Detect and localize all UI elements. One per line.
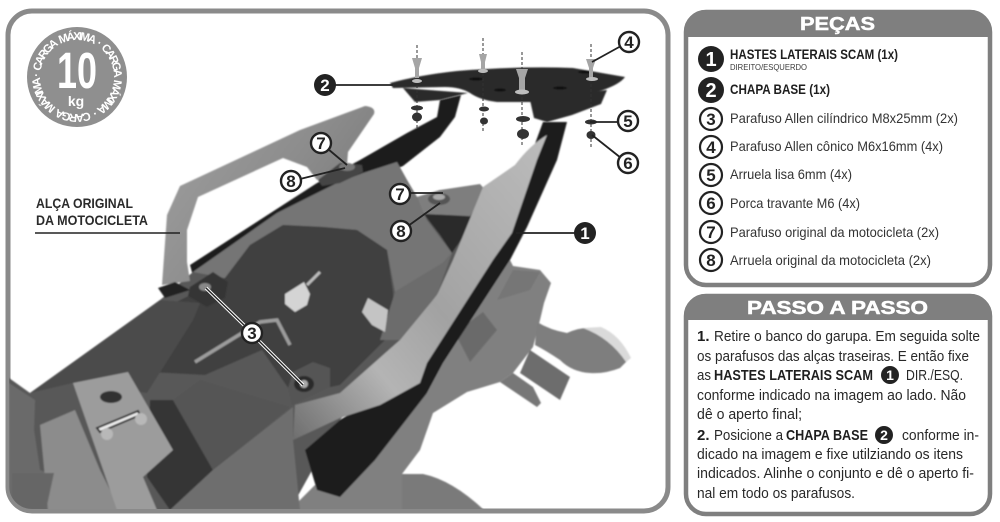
step text: 2. — [697, 427, 710, 444]
step text: dicado na imagem e fixe utilziando os itens — [697, 446, 963, 463]
callout 8 left — [281, 171, 301, 191]
handle label: DA MOTOCICLETA — [36, 212, 148, 228]
part 3: 3 — [706, 110, 716, 129]
callout 6 — [618, 153, 638, 173]
part 1 — [698, 46, 898, 72]
part 7: 7 — [706, 223, 716, 242]
right grab handle — [293, 135, 547, 440]
connector — [285, 282, 310, 312]
left black tube — [190, 95, 461, 276]
part 1: HASTES LATERAIS SCAM (1x) — [730, 46, 898, 62]
part 7 — [700, 221, 939, 243]
callout 1: 1 — [580, 224, 590, 243]
right body piece — [424, 214, 470, 253]
callout lines — [206, 46, 621, 385]
callout 5: 5 — [623, 112, 633, 131]
heading: steps: PASSO A PASSO — [747, 298, 928, 318]
step text: dê o aperto final; — [697, 406, 802, 423]
part 1: 1 — [705, 49, 717, 71]
step text: DIR./ESQ. — [906, 367, 963, 384]
part 5: 5 — [706, 166, 716, 185]
panel: parts list — [684, 10, 992, 285]
callout 7 right — [390, 184, 410, 204]
step text: conforme indicado na imagem ao lado. Não — [697, 387, 966, 404]
step text: 1. — [697, 328, 710, 345]
part 3 — [700, 108, 958, 130]
part 1: DIREITO/ESQUERDO — [730, 62, 807, 72]
seat and latch area — [9, 384, 48, 509]
callout 7 left: 7 — [316, 134, 326, 153]
callout 4 — [619, 32, 639, 52]
callout 1 — [574, 222, 596, 244]
step text: Posicione a — [714, 427, 784, 444]
step text: nal em todo os parafusos. — [697, 485, 855, 502]
tray lower — [170, 407, 300, 510]
callout 3 — [242, 323, 262, 343]
latch plate — [73, 372, 173, 510]
part 4 — [700, 136, 943, 158]
part 5 — [700, 164, 852, 186]
original far grab handle — [162, 106, 374, 285]
near clamp block — [288, 362, 330, 394]
step text: as — [697, 367, 711, 384]
part 8 — [700, 249, 931, 271]
panel: motorcycle illustration — [6, 8, 670, 514]
callout 8 right: 8 — [396, 222, 406, 241]
right black tube — [305, 122, 567, 497]
step text: Retire o banco do garupa. Em seguida solte — [714, 328, 980, 345]
part 8: 8 — [706, 251, 716, 270]
part 2: 2 — [705, 80, 717, 102]
part 5: Arruela lisa 6mm (4x) — [730, 166, 852, 182]
step text: HASTES LATERAIS SCAM — [714, 367, 873, 384]
rear wheel — [395, 474, 484, 510]
step text: CHAPA BASE — [786, 427, 868, 444]
panel: step by step — [684, 294, 992, 514]
dark wiring cavity — [150, 225, 395, 395]
max load badge: 10 — [57, 42, 97, 99]
tail fairing — [290, 260, 551, 510]
turn signal — [535, 322, 630, 373]
callout 5 — [618, 111, 638, 131]
step text: conforme in- — [902, 427, 979, 444]
seat cowl — [193, 162, 452, 292]
rack blocks under plate — [390, 67, 625, 122]
step text: indicados. Alinhe o conjunto e dê o aperto fi- — [697, 465, 974, 482]
max load badge: kg — [68, 93, 84, 109]
plate holes — [469, 70, 592, 92]
body interior — [9, 196, 473, 509]
part 2 — [698, 77, 830, 103]
callout 3: 3 — [247, 324, 257, 343]
tray dark — [147, 400, 213, 510]
far clamp — [188, 272, 228, 307]
fasteners — [411, 38, 598, 147]
callout 8 right — [391, 221, 411, 241]
part 2: CHAPA BASE (1x) — [730, 81, 830, 97]
near clamp on handle — [318, 163, 363, 186]
part 7: Parafuso original da motocicleta (2x) — [730, 224, 939, 240]
callout 2: 2 — [320, 76, 330, 95]
step text: 2 — [880, 427, 888, 443]
callout 2 — [314, 74, 336, 96]
part 6 — [700, 192, 860, 214]
part 8: Arruela original da motocicleta (2x) — [730, 252, 931, 268]
part 6: Porca travante M6 (4x) — [730, 195, 860, 211]
number plate holder — [520, 350, 570, 400]
part 3: Parafuso Allen cilíndrico M8x25mm (2x) — [730, 110, 958, 126]
photo: motorcycle tail with rack — [9, 95, 631, 510]
callout 7 left — [311, 133, 331, 153]
max load badge: · CARGA MÁXIMA · CARGA MÁXIMA · CARGA MÁXIMA — [32, 30, 122, 122]
handle label — [35, 195, 180, 233]
part 6: 6 — [706, 194, 716, 213]
callout 6: 6 — [623, 154, 633, 173]
plate bracket — [500, 373, 541, 407]
step text: os parafusos das alças traseiras. E então fixe — [697, 348, 969, 365]
lower-left strip — [30, 300, 200, 393]
part 4: Parafuso Allen cônico M6x16mm (4x) — [730, 138, 943, 154]
step text — [697, 328, 980, 502]
tray — [173, 380, 290, 470]
callout 4: 4 — [624, 33, 634, 52]
handle label: ALÇA ORIGINAL — [36, 195, 133, 211]
part 4: 4 — [706, 138, 716, 157]
step text: 1 — [886, 367, 894, 383]
callout 8 left: 8 — [286, 172, 296, 191]
callout 7 right: 7 — [395, 185, 405, 204]
base plate — [390, 67, 625, 102]
heading: parts: PEÇAS — [800, 14, 875, 34]
crumpled light area — [362, 298, 388, 332]
